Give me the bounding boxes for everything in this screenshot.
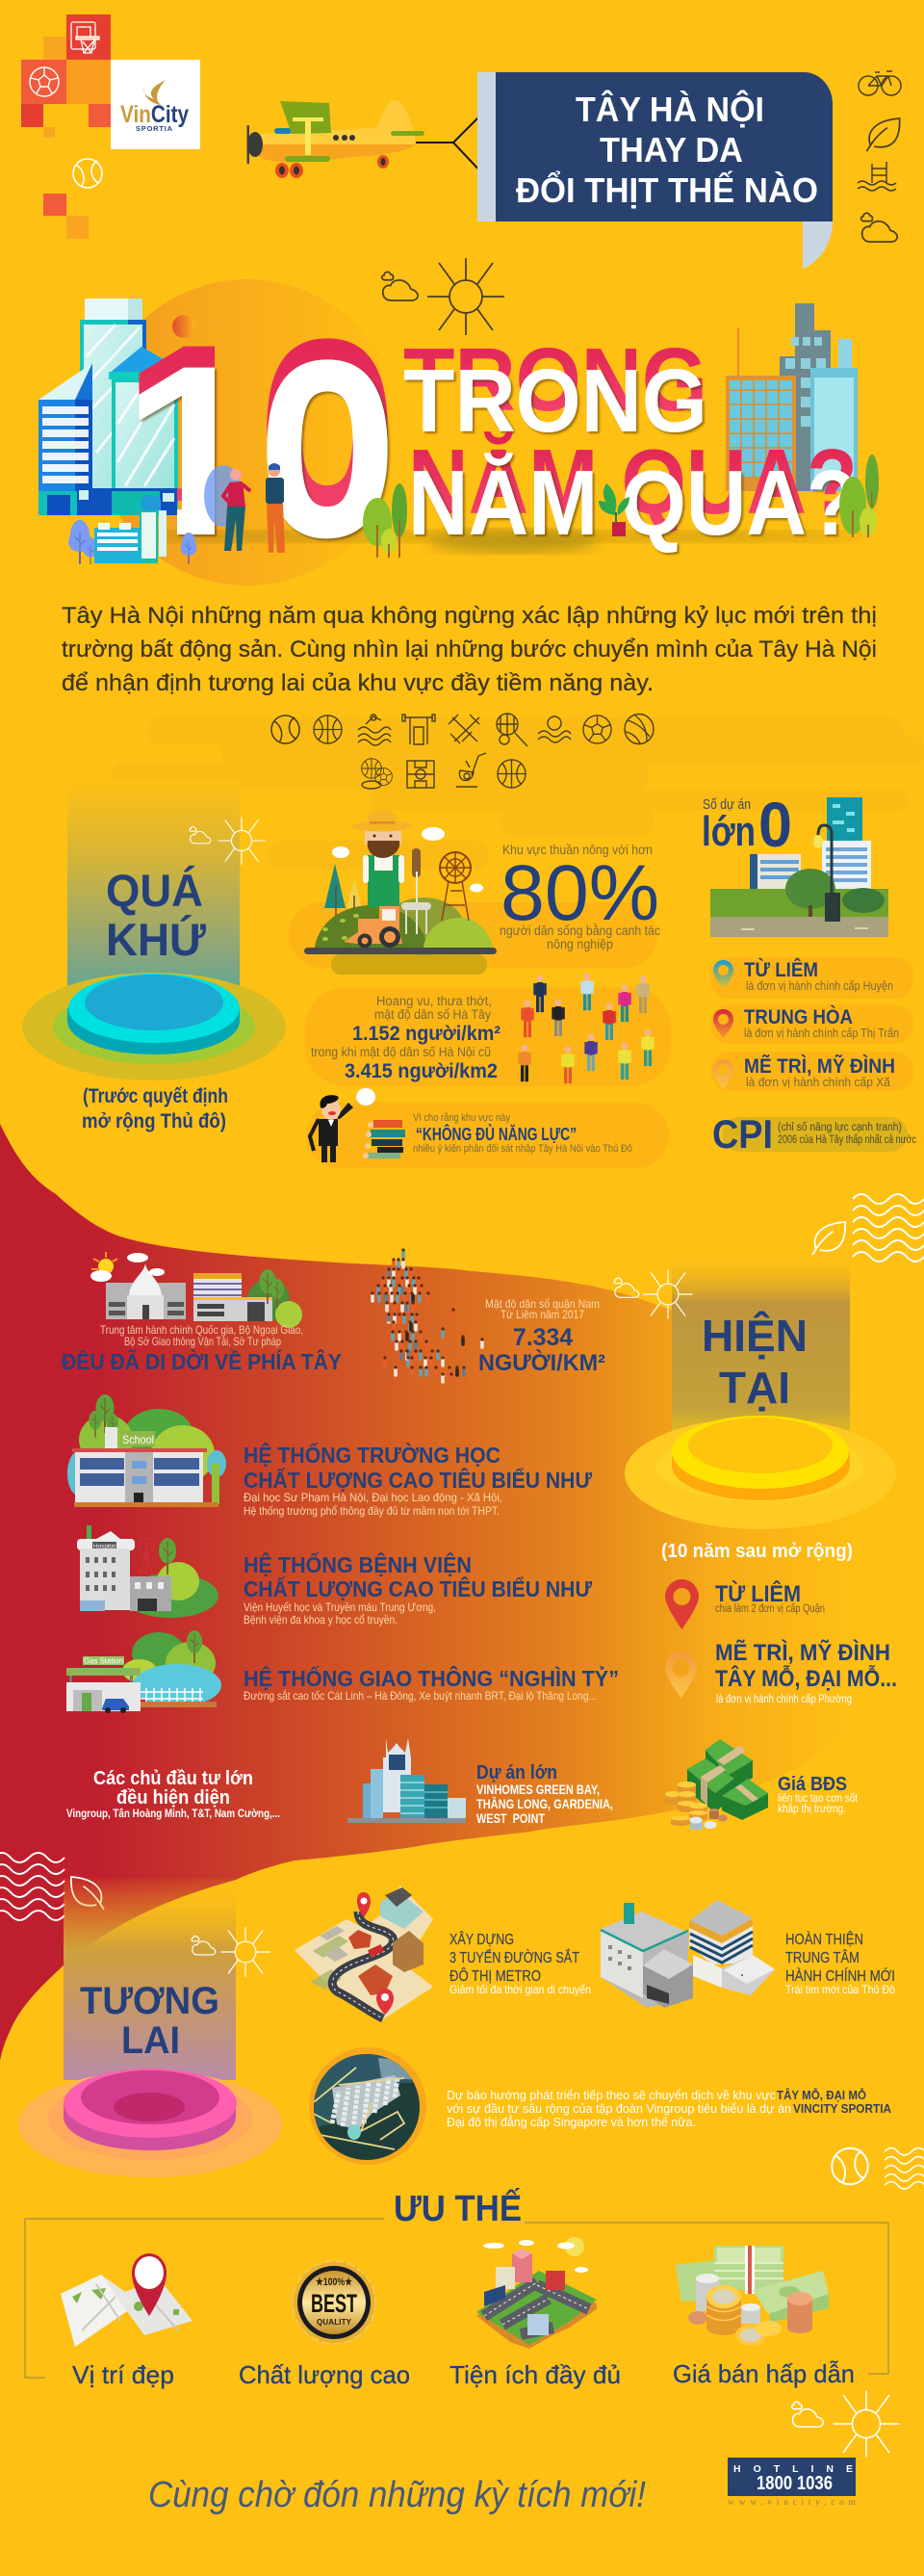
text: hospital system: Bệnh viện đa khoa y học cổ truyền. [244, 1613, 398, 1626]
text: relocated agencies [62, 1323, 342, 1374]
icon: white leaf [812, 1222, 845, 1255]
pin text: TỪ LIÊM [744, 958, 818, 981]
icon: red pin [713, 1009, 733, 1038]
potted plant [599, 483, 629, 536]
text: admin centre: Trái tim mới của Thủ Đô [785, 1983, 895, 1996]
text: forecast paragraph: Dự báo hướng phát triển tiếp theo sẽ chuyển dịch về khu vực [447, 2088, 776, 2102]
text: admin centre [785, 1930, 895, 1996]
text: big projects [476, 1762, 613, 1826]
pin text [744, 1005, 899, 1040]
text: big projects: WEST POINT [476, 1810, 545, 1826]
frame around advantages [25, 2219, 888, 2378]
title text: TÂY HÀ NỘI [576, 89, 764, 129]
text: density Nam Từ Liêm [478, 1297, 605, 1376]
big heading NĂM QUA?: NĂM QUA? [408, 452, 858, 555]
pin text [744, 1055, 895, 1089]
text: transport system [244, 1664, 619, 1703]
text: hospital system: Viện Huyết học và Truyền máu Trung Ương, [244, 1600, 436, 1614]
text: density Nam Từ Liêm: NGƯỜI/KM² [478, 1349, 605, 1376]
panel: future beam [64, 1878, 236, 2080]
two people talking [204, 463, 285, 553]
hotline box: www.vincity.com [728, 2498, 857, 2508]
text: major investors [66, 1768, 280, 1820]
gas station illustration: Gas Station [84, 1656, 123, 1666]
icon: cloud future [192, 1936, 216, 1955]
past disc [22, 973, 286, 1080]
big white number 10: 1 [121, 316, 266, 586]
icon: quality badge: BEST [311, 2289, 357, 2318]
advantage labels: Tiện ích đầy đủ [449, 2360, 621, 2389]
title text: ĐỔI THỊT THẾ NÀO [516, 169, 818, 210]
icon: sun future [220, 1927, 270, 1977]
text: school system: HỆ THỐNG TRƯỜNG HỌC [244, 1442, 500, 1468]
panel: CPI [712, 1111, 916, 1157]
advantage labels [72, 2359, 855, 2389]
metro map illustration [295, 1886, 433, 2021]
sports icons row [271, 714, 654, 789]
text: 80 percent stat: nông nghiệp [547, 936, 613, 951]
title banner [477, 72, 833, 269]
density text: mật độ dân số Hà Tây [374, 1007, 491, 1022]
past subtitle [82, 1085, 228, 1132]
text: real-estate price: liên tục tạo cơn sốt [778, 1793, 859, 1805]
heading: large projects zero: Số dự án [703, 796, 751, 813]
text: metro lines: XÂY DỰNG [449, 1930, 514, 1948]
airplane illustration [246, 100, 484, 178]
big white number 10 [139, 359, 391, 542]
intro paragraph [62, 603, 877, 696]
capability text: Vì cho rằng khu vực này [413, 1111, 510, 1124]
heading QUÁ KHỨ: KHỨ [106, 914, 206, 965]
panel: farmland [289, 902, 657, 975]
text: relocated agencies: Trung tâm hành chính Quốc gia, Bộ Ngoại Giao, [100, 1323, 303, 1337]
crowd illustration [518, 973, 654, 1083]
capability text: “KHÔNG ĐỦ NĂNG LỰC” [416, 1124, 577, 1144]
school illustration: School [122, 1433, 154, 1446]
isometric admin buildings illustration [601, 1900, 775, 2008]
big pink number 10: 0 [266, 299, 389, 557]
text: relocated agencies: ĐỀU ĐÃ DI DỜI VỀ PHÍA TÂY [62, 1348, 342, 1374]
text: relocated agencies: Bộ Sở Giao thông Vận Tải, Sở Tư pháp [124, 1335, 281, 1348]
present disc [625, 1416, 896, 1529]
decorative white waves left [0, 1853, 64, 1920]
icon: cloud [861, 213, 897, 242]
book stack icon [363, 1120, 405, 1158]
left money stack [687, 1758, 734, 1812]
icon: swimming pool [858, 162, 896, 191]
advantage labels: Vị trí đẹp [72, 2360, 174, 2389]
buildings left illustration [38, 299, 178, 515]
big heading NĂM QUA?: NĂM QUA? [408, 430, 858, 533]
heading QUÁ KHỨ [106, 865, 206, 965]
heading TƯƠNG LAI [80, 1980, 219, 2062]
gold coins [665, 1782, 728, 1830]
icon: quality badge: ★100%★ [316, 2277, 352, 2288]
density text: Hoang vu, thưa thớt, [376, 994, 492, 1008]
panel: Từ Liêm old [710, 957, 913, 999]
icon: sun past [218, 817, 266, 865]
density text: trong khi mật độ dân số Hà Nội cũ [311, 1045, 491, 1059]
text: transport system: HỆ THỐNG GIAO THÔNG “NGHÌN TỶ” [244, 1664, 619, 1691]
text: forecast paragraph: Đại đô thị đẳng cấp Singapore và hơn thế nữa. [447, 2115, 696, 2129]
right money stack [722, 1779, 768, 1820]
pin text: là đơn vị hành chính cấp Huyện [746, 979, 893, 993]
text: density Nam Từ Liêm: Mật độ dân số quận Nam [485, 1297, 600, 1311]
gas station illustration [66, 1630, 221, 1713]
text: forecast paragraph: VINCITY SPORTIA [793, 2101, 892, 2116]
density text: 1.152 người/km² [352, 1023, 500, 1045]
small red ball [172, 315, 195, 338]
text: real-estate price: Giá BĐS [778, 1774, 847, 1795]
text: forecast paragraph: với sự đầu tư sâu rộng của tập đoàn Vingroup tiêu biểu là dự án [447, 2101, 791, 2116]
text: hospital system: CHẤT LƯỢNG CAO TIÊU BIỂU NHƯ [244, 1575, 593, 1601]
pin text: MẼ TRÌ, MỸ ĐÌNH [744, 1055, 895, 1078]
subtle background bars [111, 717, 924, 870]
logo subtitle: SPORTIA [136, 124, 173, 133]
text: metro lines: ĐÔ THỊ METRO [449, 1966, 541, 1985]
heading: large projects zero [702, 789, 792, 860]
text: hospital system [244, 1551, 593, 1626]
big pink number 10 [139, 338, 388, 507]
icon: cloud past [190, 826, 211, 844]
icon: white tennis ball [832, 2148, 868, 2184]
capability text [413, 1111, 632, 1155]
intro paragraph: để nhận định tương lai của khu vực đầy tiềm năng này. [62, 670, 654, 696]
icon: bicycle [859, 71, 901, 95]
logo wordmark: VinCity [120, 101, 189, 128]
icon: amenities city [476, 2237, 597, 2349]
heading HIỆN TẠI: HIỆN [702, 1311, 808, 1361]
logo block [21, 14, 200, 149]
capability text: nhiều ý kiến phản đối sát nhập Tây Hà Nội vào Thủ Đô [413, 1143, 632, 1155]
panel: present beam [672, 1252, 850, 1459]
icon: sun top [427, 258, 504, 335]
panel: Trung Hòa old [710, 1004, 913, 1044]
skyscrapers illustration [347, 1738, 466, 1823]
text: real-estate price: khắp thị trường. [778, 1803, 846, 1815]
text: 80 percent stat: Khu vực thuần nông với hơn [502, 843, 653, 857]
panel: Mễ Trì old [710, 1052, 913, 1091]
heading: large projects zero: lớn [702, 808, 756, 855]
pin text: là đơn vị hành chính cấp Thị Trấn [744, 1027, 899, 1040]
school illustration [67, 1394, 226, 1507]
decorative white waves bottom [885, 2147, 924, 2189]
icon: orange pin [713, 1059, 733, 1089]
icon: white leaf left [71, 1877, 104, 1910]
past subtitle: mở rộng Thủ đô) [82, 1110, 226, 1132]
present pin Từ Liêm [665, 1579, 825, 1629]
big heading TRONG: TRONG [403, 329, 707, 429]
pin text [744, 958, 893, 993]
pin text: là đơn vị hành chính cấp Xã [746, 1076, 890, 1089]
text: major investors: Các chủ đầu tư lớn [93, 1768, 253, 1789]
text: admin centre: HÀNH CHÍNH MỚI [785, 1966, 895, 1985]
heading: advantages: ƯU THẾ [394, 2187, 522, 2229]
administrative buildings illustration [90, 1252, 302, 1328]
present pin Mễ Trì: MẼ TRÌ, MỸ ĐÌNH [715, 1639, 890, 1666]
text: admin centre: TRUNG TÂM [785, 1948, 860, 1966]
dark shadow below text [428, 530, 598, 553]
icon: quality badge: QUALITY [317, 2318, 352, 2327]
money illustration [665, 1739, 768, 1830]
panel: CPI: (chỉ số năng lực cạnh tranh) [778, 1122, 902, 1133]
title text [516, 89, 818, 210]
text: real-estate price [778, 1774, 859, 1815]
trees beside letters [363, 483, 407, 558]
panel: CPI: CPI [712, 1111, 773, 1157]
decorative white waves top right [853, 1194, 924, 1262]
density text [311, 994, 500, 1082]
panel: not capable [306, 1088, 669, 1168]
pin text: TRUNG HÒA [744, 1005, 853, 1028]
heading QUÁ KHỨ: QUÁ [106, 865, 203, 916]
small buildings and bushes [68, 495, 196, 564]
present pin Mễ Trì: là đơn vị hành chính cấp Phường [716, 1694, 852, 1705]
trees right [839, 455, 879, 537]
icon: basketball hoop [71, 22, 99, 53]
text: hospital system: HỆ THỐNG BỆNH VIỆN [244, 1551, 472, 1577]
top money stack [706, 1739, 753, 1793]
hotline box: 1800 1036 [757, 2473, 833, 2494]
text: big projects: THĂNG LONG, GARDENIA, [476, 1796, 613, 1811]
text: school system: Hệ thống trường phổ thông đầy đủ từ mầm non tới THPT. [244, 1504, 500, 1518]
hospital illustration: Hospital [93, 1543, 116, 1550]
hotline box: HOTLINE [733, 2463, 853, 2475]
intro paragraph: trường bất động sản. Cùng nhìn lại những bước chuyển mình của Tây Hà Nội [62, 637, 877, 663]
icon: map with pin [61, 2253, 192, 2347]
decorative squares [43, 194, 89, 239]
text: transport system: Đường sắt cao tốc Cát Linh – Hà Đông, Xe buýt nhanh BRT, Đại lộ Thăng Long... [244, 1688, 597, 1703]
farmer illustration [304, 810, 497, 955]
icon: football [30, 67, 59, 96]
aerial photo circle [309, 2047, 426, 2165]
heading HIỆN TẠI: TẠI [719, 1363, 790, 1413]
businessman illustration [310, 1088, 375, 1162]
orange circle backdrop [94, 279, 400, 585]
text: metro lines [449, 1930, 591, 1996]
hospital illustration [77, 1525, 218, 1618]
white logo box [111, 60, 200, 149]
city park illustration [710, 797, 888, 937]
big heading TRONG: TRONG [403, 351, 707, 451]
present pin Mễ Trì [665, 1639, 897, 1705]
text: metro lines: 3 TUYẾN ĐƯỜNG SẮT [449, 1948, 579, 1966]
ground shadow [106, 531, 866, 542]
big white number 10: 0 [266, 320, 389, 578]
density text: 3.415 người/km2 [345, 1060, 498, 1082]
text: density Nam Từ Liêm: 7.334 [513, 1324, 573, 1351]
heading: large projects zero: 0 [758, 789, 792, 860]
panel: population density [305, 973, 671, 1086]
icon: tennis ball left [73, 159, 102, 188]
hotline box [728, 2458, 857, 2508]
text: 80 percent stat: 80% [500, 849, 659, 937]
text: density Nam Từ Liêm: Từ Liêm năm 2017 [500, 1308, 584, 1321]
text: school system [244, 1442, 593, 1518]
text: forecast paragraph [447, 2088, 892, 2129]
text: big projects: VINHOMES GREEN BAY, [476, 1782, 600, 1797]
past subtitle: (Trước quyết định [83, 1085, 228, 1107]
text: 80 percent stat: người dân sống bằng canh tác [500, 923, 660, 938]
icon: white cloud bottom [792, 2402, 823, 2427]
present subtitle: (10 năm sau mở rộng) [661, 1541, 853, 1562]
panel: past beam [67, 780, 240, 1021]
text: admin centre: HOÀN THIỆN [785, 1930, 863, 1948]
icon: blue pin [713, 960, 733, 989]
icon: sun present [643, 1269, 693, 1319]
icon: white sun bottom [834, 2391, 899, 2457]
text: major investors: Vingroup, Tân Hoàng Minh, T&T, Nam Cường,... [66, 1807, 280, 1820]
buildings right illustration [726, 303, 858, 491]
text: school system: Đại học Sư Phạm Hà Nội, Đại học Lao động - Xã Hội, [244, 1491, 502, 1504]
present pin Từ Liêm: TỪ LIÊM [715, 1580, 801, 1607]
advantage labels: Giá bán hấp dẫn [673, 2359, 855, 2388]
text: major investors: đều hiện diện [116, 1787, 230, 1808]
icon: cloud present [614, 1278, 639, 1297]
future disc [18, 2069, 282, 2177]
icon: leaf [866, 118, 900, 151]
closing tagline: Cùng chờ đón những kỳ tích mới! [148, 2475, 646, 2515]
icon: logo swoosh [143, 80, 166, 105]
text: big projects: Dự án lớn [476, 1762, 557, 1783]
icon: money stacks [676, 2246, 829, 2346]
heading TƯƠNG LAI: TƯƠNG [80, 1980, 219, 2022]
text: metro lines: Giảm tối đa thời gian di chuyển [449, 1983, 591, 1996]
big pink number 10: 1 [121, 295, 266, 565]
advantage labels: Chất lượng cao [239, 2360, 410, 2389]
text: forecast paragraph: TÂY MỖ, ĐẠI MỖ [777, 2088, 866, 2102]
heading HIỆN TẠI [702, 1311, 808, 1413]
crowd map illustration [372, 1250, 482, 1382]
intro paragraph: Tây Hà Nội những năm qua không ngừng xác lập những kỷ lục mới trên thị [62, 603, 877, 629]
present pin Mễ Trì: TÂY MỖ, ĐẠI MỖ... [715, 1664, 897, 1692]
heading TƯƠNG LAI: LAI [121, 2019, 180, 2062]
red swoosh band [0, 1124, 924, 2061]
text: school system: CHẤT LƯỢNG CAO TIÊU BIỂU NHƯ [244, 1467, 593, 1493]
title text: THAY DA [600, 130, 743, 169]
present pin Từ Liêm: chia làm 2 đơn vị cấp Quận [715, 1603, 825, 1615]
icon: cloud top [382, 272, 418, 300]
icon: quality badge [293, 2261, 375, 2344]
